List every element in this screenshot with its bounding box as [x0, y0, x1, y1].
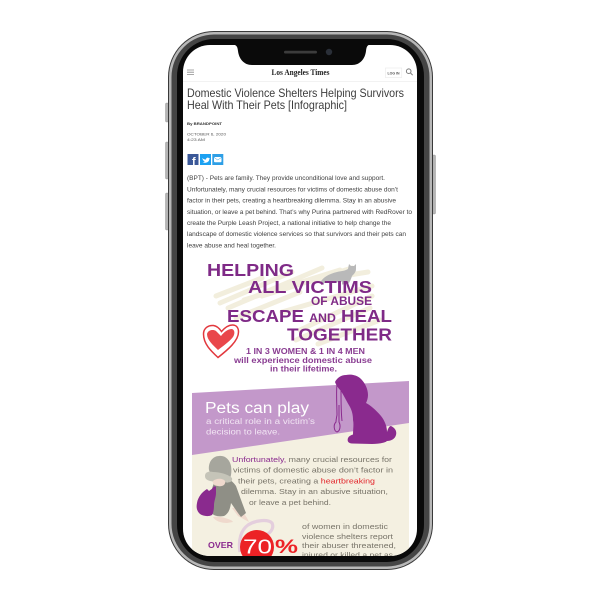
- article body text: [187, 175, 413, 250]
- camera: [326, 49, 332, 55]
- icon: purple cat: [197, 486, 216, 516]
- statistic: over 70 percent: %: [275, 537, 298, 558]
- article body text: (BPT) - Pets are family. They provide unconditional love and support.: [187, 175, 385, 182]
- icon: facebook: f: [192, 156, 196, 168]
- infographic: [192, 260, 409, 564]
- icon: hamburger menu: [187, 70, 194, 74]
- cream background scribble: [216, 268, 380, 344]
- text: unfortunately paragraph: dilemma. Stay in an abusive situation,: [241, 487, 388, 496]
- heading: HELPING: [207, 260, 294, 280]
- headline: [188, 88, 404, 112]
- text: unfortunately paragraph: [232, 455, 393, 507]
- speaker: [284, 51, 317, 54]
- headline: Domestic Violence Shelters Helping Survivors: [187, 86, 404, 100]
- heading: OF ABUSE: [311, 296, 372, 308]
- text: unfortunately paragraph: Unfortunately, many crucial resources for: [232, 455, 393, 464]
- phone body: [168, 31, 433, 570]
- heading: ESCAPE AND HEAL: [227, 306, 392, 326]
- statistic: over 70 percent: injured or killed a pet as: [302, 550, 393, 560]
- log in button: [385, 68, 402, 78]
- icon: red scribbled heart: [204, 325, 238, 358]
- purple banner: Pets can play: [205, 400, 309, 417]
- article body text: situation, or leave a pet behind. That’s why Purina partnered with RedRover to: [187, 209, 413, 216]
- article body text: factor in their pets, creating a heartbreaking dilemma. Stay in an abusive: [187, 198, 397, 204]
- share buttons: [188, 154, 224, 165]
- statistic: over 70 percent: of women in domestic: [302, 522, 388, 531]
- icon: search: [406, 69, 413, 75]
- icon: twitter: [200, 154, 211, 165]
- heading: [208, 264, 392, 340]
- statistic: over 70 percent: [208, 519, 396, 556]
- article body text: Unfortunately, many crucial resources for victims of domestic abuse don’t: [187, 186, 398, 193]
- byline and date: [187, 122, 226, 141]
- article body text: leave abuse and heal together.: [187, 242, 276, 250]
- statistic: over 70 percent: 70: [243, 536, 272, 558]
- article body text: create the Purple Leash Project, a national initiative to help change the: [187, 220, 392, 227]
- cream lower panel: [192, 410, 409, 556]
- heading: ALL VICTIMS: [248, 277, 372, 297]
- site header: [183, 67, 417, 82]
- icon: purple dog with leash: [334, 375, 396, 444]
- icon: mail: [212, 154, 223, 165]
- statistic: one in three: will experience domestic abuse: [233, 356, 373, 365]
- statistic: one in three: 1 IN 3 WOMEN & 1 IN 4 MEN: [246, 347, 365, 356]
- byline and date: 4:23 AM: [187, 137, 205, 142]
- byline and date: By BRANDPOINT: [187, 121, 223, 126]
- text: unfortunately paragraph: their pets, creating a heartbreaking: [238, 476, 375, 485]
- purple banner: decision to leave.: [206, 428, 280, 436]
- icon: woman hugging cat: [197, 456, 249, 523]
- phone side buttons: [166, 103, 436, 230]
- statistic: over 70 percent: OVER: [208, 540, 233, 550]
- statistic: over 70 percent: violence shelters report: [302, 532, 393, 541]
- text: unfortunately paragraph: or leave a pet behind.: [249, 498, 331, 507]
- Los Angeles Times logo: Los Angeles Times: [272, 67, 330, 77]
- statistic: one in three: in their lifetime.: [270, 364, 337, 374]
- log in button: LOG IN: [388, 72, 400, 76]
- icon: grey cat: [320, 264, 356, 284]
- purple banner: [192, 381, 409, 455]
- statistic: over 70 percent: their abuser threatened,: [302, 541, 396, 550]
- statistic: one in three: [234, 348, 372, 372]
- purple banner: a critical role in a victim’s: [206, 417, 315, 426]
- heading: TOGETHER: [287, 324, 392, 344]
- text: unfortunately paragraph: victims of domestic abuse don’t factor in: [233, 465, 393, 474]
- article body text: landscape of domestic violence services so that survivors and their pets can: [187, 231, 406, 238]
- headline: Heal With Their Pets [Infographic]: [187, 98, 347, 112]
- byline and date: OCTOBER 6, 2020: [187, 132, 227, 136]
- phone screen: [183, 45, 417, 564]
- phone notch: [232, 44, 371, 65]
